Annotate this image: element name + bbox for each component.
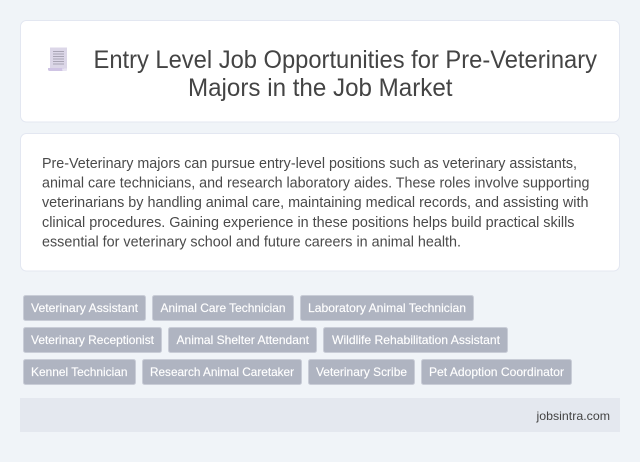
tag: Kennel Technician: Kennel Technician: [31, 365, 128, 379]
tag: Laboratory Animal Technician: [300, 296, 474, 320]
text block: description: clinical procedures. Gaining experience in these positions helps build practical skills: [42, 215, 574, 231]
panel: title header: [20, 20, 620, 122]
tag: Animal Care Technician: Animal Care Technician: [160, 301, 286, 315]
heading: Entry Level Job Opportunities for Pre-Veterinary: [94, 46, 597, 74]
tag: Veterinary Scribe: [308, 360, 414, 384]
tag: Wildlife Rehabilitation Assistant: [324, 328, 508, 352]
text block: description: animal care technicians, and research laboratory aides. These roles involve supporting: [42, 176, 590, 192]
text block: description: [42, 156, 590, 250]
text block: description: veterinarians by handling animal care, maintaining medical records, and assisting with: [42, 195, 588, 211]
tag: Animal Care Technician: [152, 296, 294, 320]
icon: document scroll: [48, 48, 67, 71]
tag list: job titles: [24, 296, 572, 384]
tag: Veterinary Assistant: [24, 296, 146, 320]
tag: Veterinary Receptionist: [24, 328, 162, 352]
heading: [94, 46, 597, 102]
tag: Wildlife Rehabilitation Assistant: Wildlife Rehabilitation Assistant: [332, 333, 501, 347]
tag: Pet Adoption Coordinator: [422, 360, 572, 384]
tag: Pet Adoption Coordinator: Pet Adoption Coordinator: [429, 365, 564, 379]
footer source text: jobsintra.com: [535, 409, 610, 423]
tag: Research Animal Caretaker: [142, 360, 302, 384]
tag: Veterinary Receptionist: Veterinary Receptionist: [31, 333, 155, 347]
tag: Animal Shelter Attendant: [168, 328, 316, 352]
panel: description: [20, 134, 620, 271]
tag: Veterinary Assistant: Veterinary Assistant: [31, 301, 139, 315]
tag: Research Animal Caretaker: Research Animal Caretaker: [150, 365, 294, 379]
footer bar: [20, 398, 620, 432]
tag: Laboratory Animal Technician: Laboratory Animal Technician: [308, 301, 466, 315]
tag: Animal Shelter Attendant: Animal Shelter Attendant: [176, 333, 310, 347]
tag: Kennel Technician: [24, 360, 136, 384]
tag: Veterinary Scribe: Veterinary Scribe: [316, 365, 407, 379]
text block: description: essential for veterinary school and future careers in animal health.: [42, 234, 461, 250]
text block: description: Pre-Veterinary majors can pursue entry-level positions such as veterinary assistants,: [42, 156, 577, 172]
heading: Majors in the Job Market: [188, 74, 453, 102]
